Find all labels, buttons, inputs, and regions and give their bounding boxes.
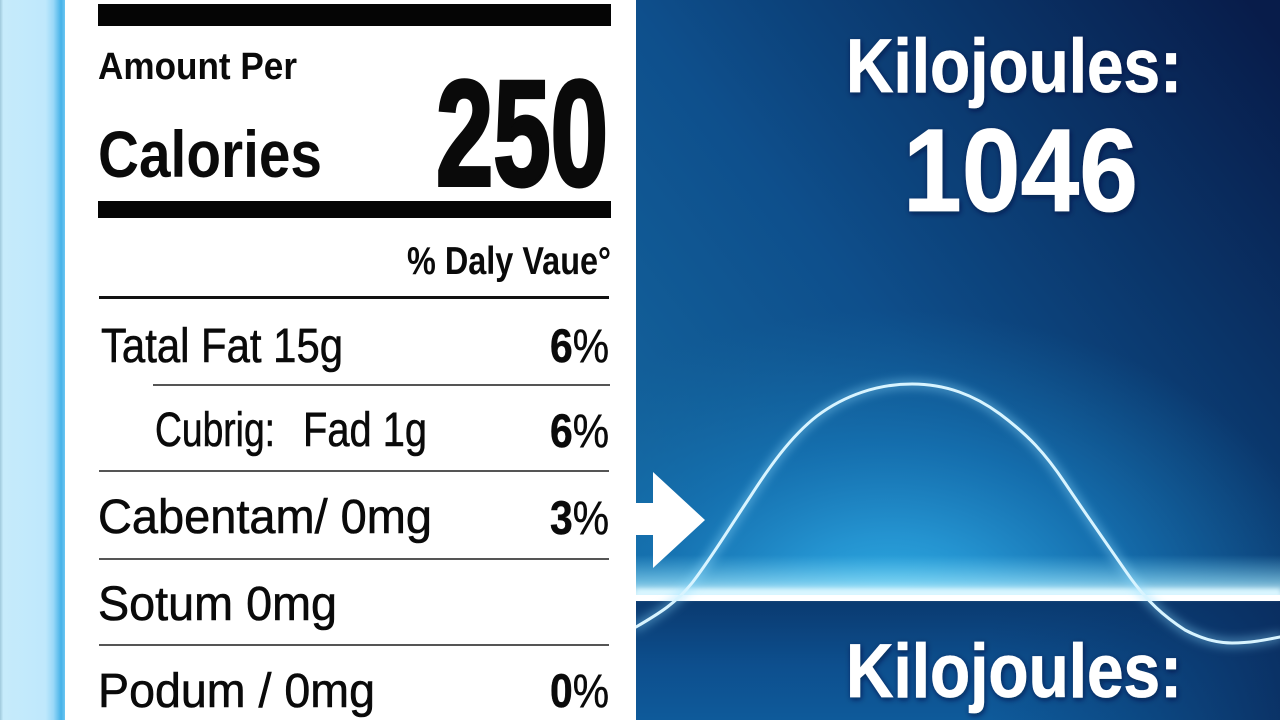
middle thick rule <box>98 201 611 218</box>
energy wave curve <box>636 384 1280 643</box>
row: total fat: Tatal Fat 15g <box>101 320 343 373</box>
row: podum: Podum / 0mg <box>98 665 375 718</box>
value: 250: 250 <box>436 49 608 217</box>
text: amount per: Amount Per <box>98 46 297 88</box>
row: total fat: 6% <box>550 319 609 372</box>
arrow <box>636 472 705 568</box>
rule <box>99 470 609 472</box>
row: sub fat: Fad 1g <box>303 404 427 457</box>
top thick rule <box>98 4 611 26</box>
row: total fat <box>101 319 609 373</box>
row: cholesterol: Cabentam/ 0mg <box>98 491 432 544</box>
rule <box>99 644 609 646</box>
row: podum <box>98 664 609 718</box>
heading: kilojoules top: Kilojoules: <box>846 24 1182 109</box>
row: cholesterol <box>98 491 609 544</box>
left light blue strip <box>0 0 65 720</box>
row: sub fat: Cubrig: <box>155 404 275 457</box>
heading: kilojoules bottom: Kilojoules: <box>846 629 1182 714</box>
text: percent daily value: % Daly Vaue° <box>407 240 611 283</box>
row: sub fat <box>155 404 609 457</box>
panel: nutrition facts label <box>65 0 636 720</box>
rule under daily value <box>99 296 609 299</box>
row: sodium: Sotum 0mg <box>98 578 337 631</box>
row: sub fat: 6% <box>550 404 609 457</box>
text: calories: Calories <box>98 117 322 191</box>
panel: energy background <box>636 0 1280 720</box>
horizon glow line <box>636 589 1280 601</box>
row: cholesterol: 3% <box>550 491 609 544</box>
row: podum: 0% <box>550 664 609 717</box>
value: 1046: 1046 <box>903 105 1138 237</box>
rule <box>153 384 610 386</box>
rule <box>99 558 609 560</box>
